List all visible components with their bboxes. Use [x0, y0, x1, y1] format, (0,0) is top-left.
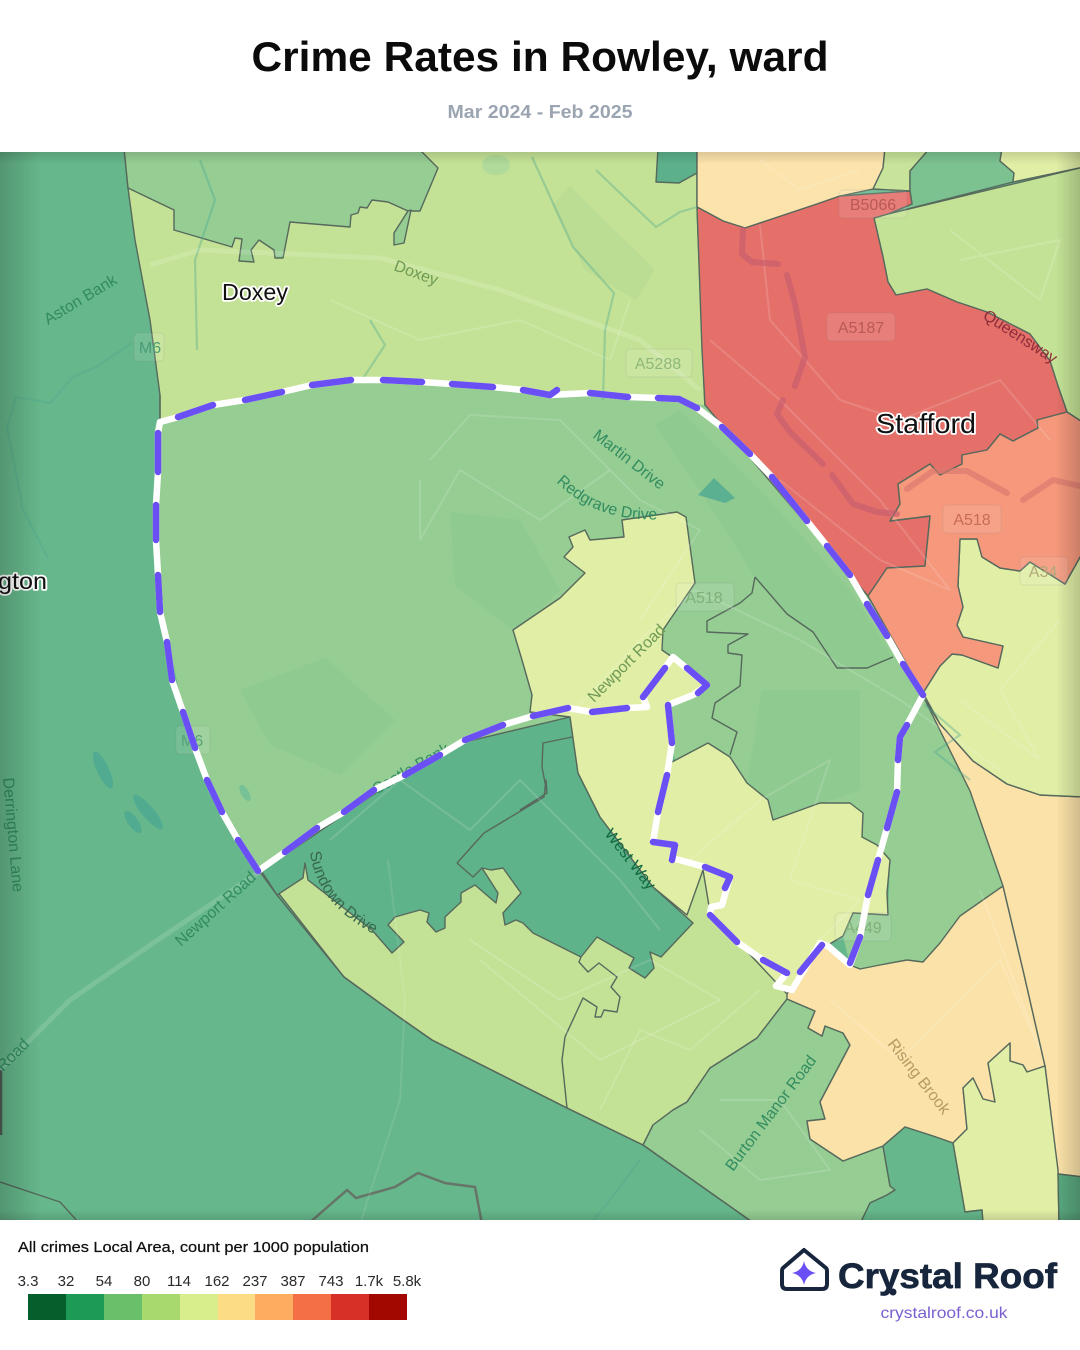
icon: house with star: [782, 1250, 827, 1289]
road labels: Newport Road: [585, 621, 669, 706]
area: south light green: [278, 868, 786, 1146]
road labels: Newport Road: [172, 869, 260, 950]
road labels: Aston Bank: [41, 271, 121, 328]
area: east pale: [923, 539, 1080, 797]
legend scale labels: 237: [242, 1273, 268, 1290]
road shields: A34: [1029, 564, 1057, 581]
area: pale Rowley north and east: [513, 512, 890, 994]
place labels: Stafford: [876, 408, 976, 439]
map edge shading: [0, 152, 1080, 1220]
legend scale labels: 32: [58, 1273, 74, 1290]
road shields: B5066: [850, 197, 896, 214]
area: top green square: [656, 148, 697, 183]
legend scale labels: 5.8k: [393, 1273, 422, 1290]
legend scale labels: 162: [204, 1273, 230, 1290]
road shields: A518: [685, 590, 723, 607]
choropleth map: [0, 148, 1080, 1224]
area: Castle Bank dark green: [260, 717, 693, 978]
road shields: A518: [953, 512, 991, 529]
place labels: [0, 279, 976, 594]
road shields: A449: [844, 920, 882, 937]
legend title: All crimes Local Area, count per 1000 population: [18, 1239, 369, 1256]
legend scale labels: 3.3: [18, 1273, 38, 1290]
area: top right light: [872, 152, 926, 191]
area: Queensway light green: [874, 167, 1080, 423]
area: Rowley main green: [155, 381, 1003, 969]
area: top right green: [896, 152, 1014, 212]
logo: Crystal Roof: [782, 1250, 1057, 1322]
legend scale labels: 387: [280, 1273, 306, 1290]
road shields: [134, 190, 1068, 941]
road shields: A5288: [635, 356, 681, 373]
road labels: [0, 258, 1060, 1174]
road labels: Sundown Drive: [310, 852, 376, 933]
thick boundary bottom: [308, 1173, 482, 1224]
road labels: Doxey: [392, 258, 440, 289]
wordmark: Crystal Roof: [838, 1257, 1057, 1296]
road labels: Martin Drive: [590, 427, 668, 493]
road shields: M6: [139, 340, 161, 357]
area: east peach strip: [925, 700, 1080, 1177]
road labels: Queensway: [980, 307, 1060, 367]
road shields: M6: [181, 733, 203, 750]
area: top peach: [697, 148, 885, 228]
ward boundary: Rowley: [156, 380, 923, 990]
area: Rising Brook peach: [787, 886, 1045, 1161]
river through Stafford: [742, 230, 1080, 514]
website: crystalroof.co.uk: [880, 1305, 1009, 1322]
area: north Doxey green: [124, 148, 438, 262]
area: Doxey field: [552, 186, 655, 300]
area: top right pale: [1000, 148, 1080, 182]
place labels: Doxey: [222, 279, 288, 305]
road network: [0, 160, 1060, 1224]
legend scale labels: 743: [318, 1273, 344, 1290]
legend colour swatches: [28, 1294, 407, 1320]
area: subtle darker fields: [240, 410, 893, 820]
road shields: A5187: [838, 320, 884, 337]
area: south dark green: [860, 1127, 983, 1224]
area: south east pale: [953, 1043, 1059, 1224]
rivers: [7, 157, 970, 1224]
area: far bottom right: [1058, 1174, 1080, 1224]
road labels: Burton Manor Road: [723, 1053, 820, 1174]
title: Crime Rates in Rowley, ward: [252, 33, 828, 80]
legend scale labels: 54: [96, 1273, 112, 1290]
area boundaries: internal lines: [0, 395, 893, 1224]
area: Stafford centre red: [697, 191, 1067, 596]
area: Doxey north-west: [124, 148, 705, 425]
road labels: Castle Bank: [370, 740, 454, 798]
area: small sliver: [394, 210, 411, 245]
subtitle: date range: Mar 2024 - Feb 2025: [448, 102, 632, 122]
road labels: Rising Brook: [884, 1036, 954, 1119]
legend: [18, 1239, 422, 1320]
legend scale labels: 1.7k: [355, 1273, 384, 1290]
road labels: West Way: [601, 826, 659, 893]
legend scale labels: 80: [134, 1273, 150, 1290]
legend scale labels: 114: [167, 1273, 191, 1290]
legend scale labels: [18, 1273, 422, 1290]
road labels: Redgrave Drive: [557, 474, 656, 520]
area: Burton Manor green: [643, 999, 895, 1224]
ponds: [89, 155, 735, 836]
area: salmon orange: [868, 412, 1080, 693]
